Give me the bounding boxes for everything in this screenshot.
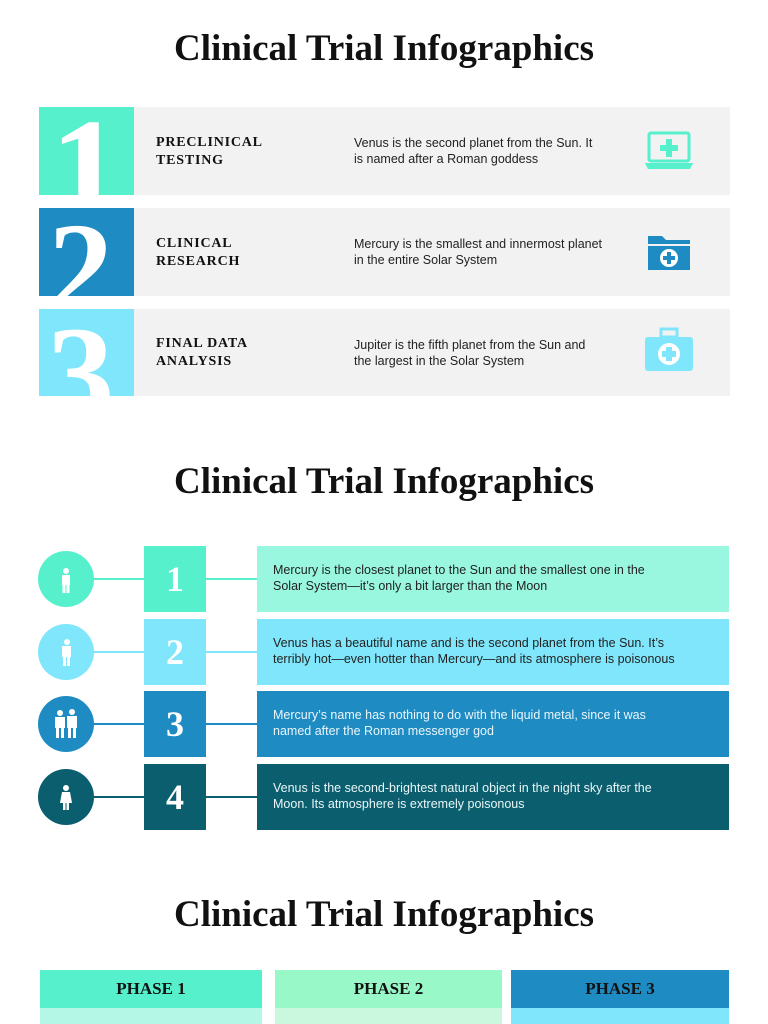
phase 2 header: [275, 970, 502, 1008]
heading: TESTING: [156, 153, 224, 168]
title 3: Clinical Trial Infographics: [174, 894, 594, 935]
phase 1 header: PHASE 1: [116, 979, 186, 998]
number box 4: 4: [166, 777, 184, 817]
heading: [156, 135, 263, 168]
phase 2 column: [275, 970, 502, 1024]
heading: RESEARCH: [156, 254, 240, 269]
text box 4: Venus is the second-brightest natural object in the night sky after the: [273, 781, 652, 795]
icon circle: two people: [38, 696, 94, 752]
heading: [156, 236, 240, 269]
description: Mercury is the smallest and innermost planet in the entire Solar System: [354, 237, 602, 267]
row panel: [134, 309, 730, 396]
text box 3: named after the Roman messenger god: [273, 724, 494, 738]
number box 2: 2: [166, 632, 184, 672]
number 2: [39, 208, 134, 296]
row 1: preclinical testing: [39, 107, 730, 195]
number box 3: 3: [166, 704, 184, 744]
phase 3 header: PHASE 3: [585, 979, 655, 998]
phase 1 column: [40, 970, 262, 1024]
row panel: [134, 208, 730, 296]
timeline step 3: [38, 691, 729, 757]
number box 1: 1: [166, 559, 184, 599]
text box 2: [257, 619, 729, 685]
text box 4: Moon. Its atmosphere is extremely poisonous: [273, 796, 525, 810]
number box 1: [144, 546, 206, 612]
timeline step 2: [38, 619, 729, 685]
text box 2: Venus has a beautiful name and is the second planet from the Sun. It’s: [273, 636, 664, 650]
heading: CLINICAL: [156, 236, 232, 251]
icon circle: doctor: [38, 624, 94, 680]
title 1: Clinical Trial Infographics: [174, 28, 594, 69]
text box 1: [257, 546, 729, 612]
icon: medical folder: [648, 236, 690, 270]
heading: [156, 336, 248, 369]
icon circle: woman: [38, 769, 94, 825]
phase 3 header: [511, 970, 729, 1008]
text box 1: Mercury is the closest planet to the Sun and the smallest one in the Solar System—it’s only a bit larger than the Moon: [273, 563, 645, 592]
timeline step 1: [38, 546, 729, 612]
icon: laptop medical: [645, 132, 693, 169]
phase 3 column: [511, 970, 729, 1024]
number box 2: [144, 619, 206, 685]
number box 3: [144, 691, 206, 757]
title 2: Clinical Trial Infographics: [174, 461, 594, 502]
icon circle: person: [38, 551, 94, 607]
phase 2 header: PHASE 2: [354, 979, 423, 998]
phase 1 header: [40, 970, 262, 1008]
icon: first aid kit: [645, 328, 693, 371]
row 2: clinical research: [39, 208, 730, 296]
row panel: [134, 107, 730, 195]
number box 4: [144, 764, 206, 830]
timeline step 4: [38, 764, 729, 830]
row 3: final data analysis: [39, 309, 730, 396]
heading: PRECLINICAL: [156, 135, 263, 150]
text box 2: terribly hot—even hotter than Mercury—and its atmosphere is poisonous: [273, 652, 675, 666]
text box 4: [257, 764, 729, 830]
heading: ANALYSIS: [156, 354, 232, 369]
text box 3: Mercury’s name has nothing to do with the liquid metal, since it was: [273, 708, 646, 722]
description: Venus is the second planet from the Sun. It is named after a Roman goddess: [354, 136, 592, 166]
text box 3: [257, 691, 729, 757]
description: Jupiter is the fifth planet from the Sun and the largest in the Solar System: [354, 338, 585, 368]
heading: FINAL DATA: [156, 336, 248, 351]
